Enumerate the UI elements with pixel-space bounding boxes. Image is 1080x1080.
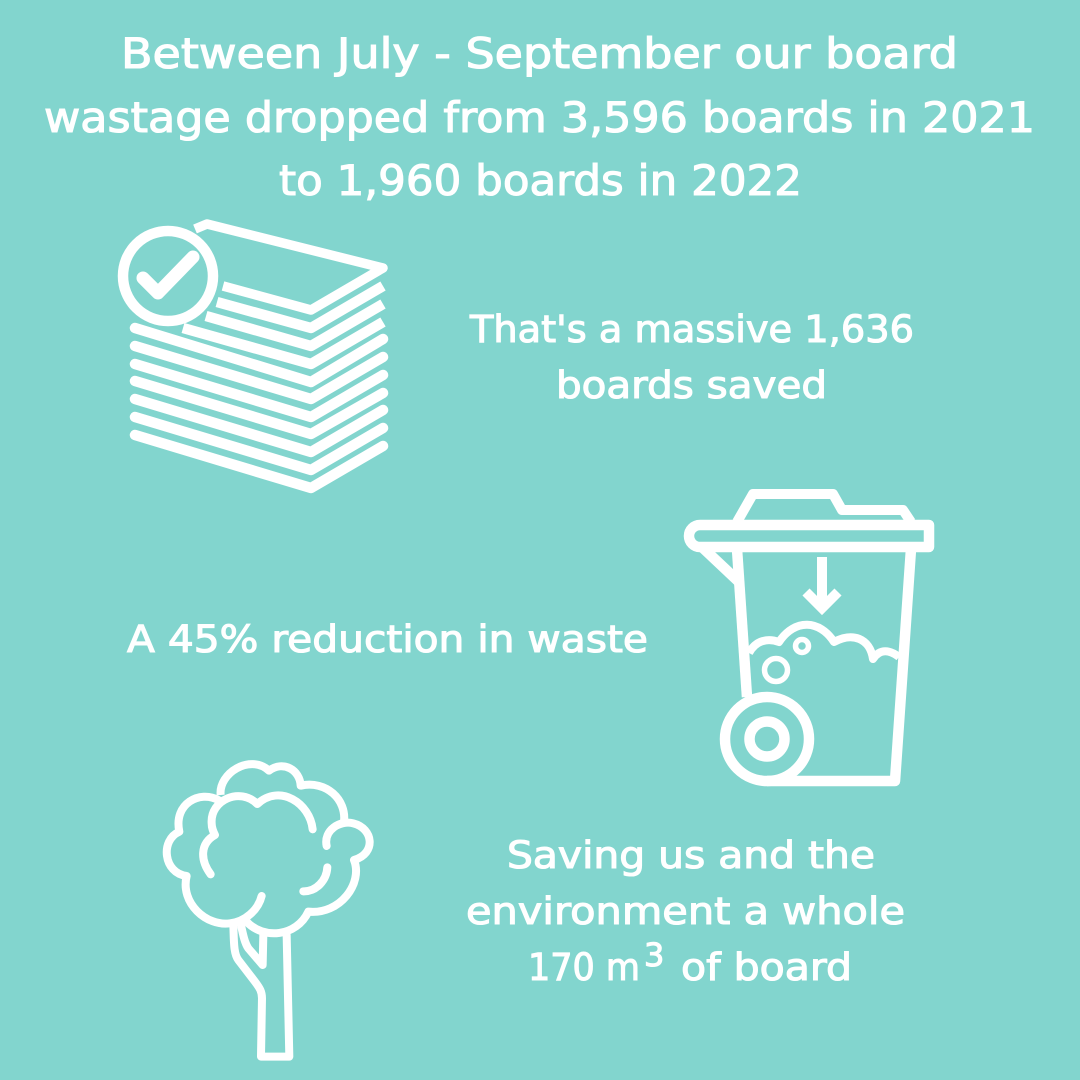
title (44, 29, 1035, 205)
text: environment saving: of board (681, 945, 852, 989)
text: boards saved: boards saved (556, 363, 827, 407)
text: environment saving (466, 833, 905, 989)
text: environment saving: environment a whole (466, 889, 905, 933)
text: environment saving: 3 (644, 936, 664, 974)
icon: check circle (123, 231, 213, 321)
text: boards saved: That's a massive 1,636 (469, 307, 914, 351)
icon: tree (167, 764, 370, 1057)
title: to 1,960 boards in 2022 (279, 156, 802, 205)
text: waste reduction: A 45% reduction in waste (127, 617, 648, 661)
foam and bubbles (749, 625, 899, 682)
icon: wheelie bin (689, 494, 929, 781)
text: environment saving: Saving us and the (507, 833, 875, 877)
text: boards saved (469, 307, 914, 407)
title: wastage dropped from 3,596 boards in 2021 (44, 93, 1035, 142)
text: environment saving: 170 m (528, 945, 640, 989)
title: Between July - September our board (121, 29, 958, 78)
icon: stack of boards with check mark (123, 224, 383, 488)
icon: down arrow (806, 557, 838, 608)
